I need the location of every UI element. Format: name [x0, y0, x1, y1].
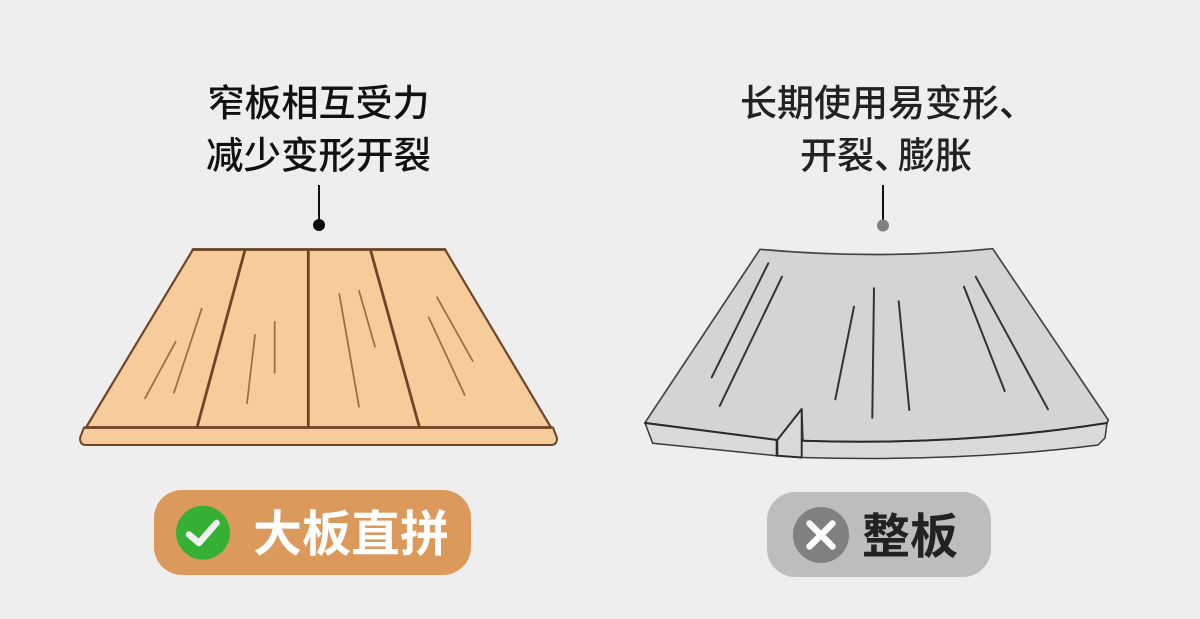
- wood grain lines: [145, 291, 473, 407]
- illustration: jointed planks: [80, 250, 557, 445]
- caption: narrow boards: 窄板相互受力: [208, 83, 430, 124]
- caption: less deformation: 减少变形开裂: [206, 134, 431, 176]
- pill text: 大板直拼: [253, 508, 449, 562]
- label pill: solid board: [767, 492, 991, 577]
- icon: green check: [176, 506, 230, 560]
- board front edge: [645, 423, 1107, 458]
- plank dividers: [86, 250, 551, 428]
- board top surface: [645, 249, 1108, 442]
- label pill: wide-plank joint: [154, 490, 471, 575]
- caption: cracking and swelling: 膨胀: [898, 136, 972, 176]
- crack lines: [712, 263, 1048, 418]
- panel: wide-plank straight joint: [80, 83, 557, 575]
- pill text: 整板: [862, 511, 958, 564]
- callout pointer: left: [313, 185, 325, 231]
- icon: grey cross: [793, 507, 849, 563]
- caption: cracking and swelling: 开裂、: [800, 136, 911, 176]
- caption: long-term deformation: 长期使用易变形、: [740, 83, 1036, 124]
- front edge lines: [645, 423, 1107, 456]
- plank front lip: [80, 428, 557, 445]
- callout pointer: right: [877, 185, 889, 232]
- crack notch: [777, 409, 802, 458]
- panel: solid board: [645, 83, 1108, 577]
- plank top surface: [86, 250, 551, 428]
- illustration: warped solid board: [645, 249, 1108, 458]
